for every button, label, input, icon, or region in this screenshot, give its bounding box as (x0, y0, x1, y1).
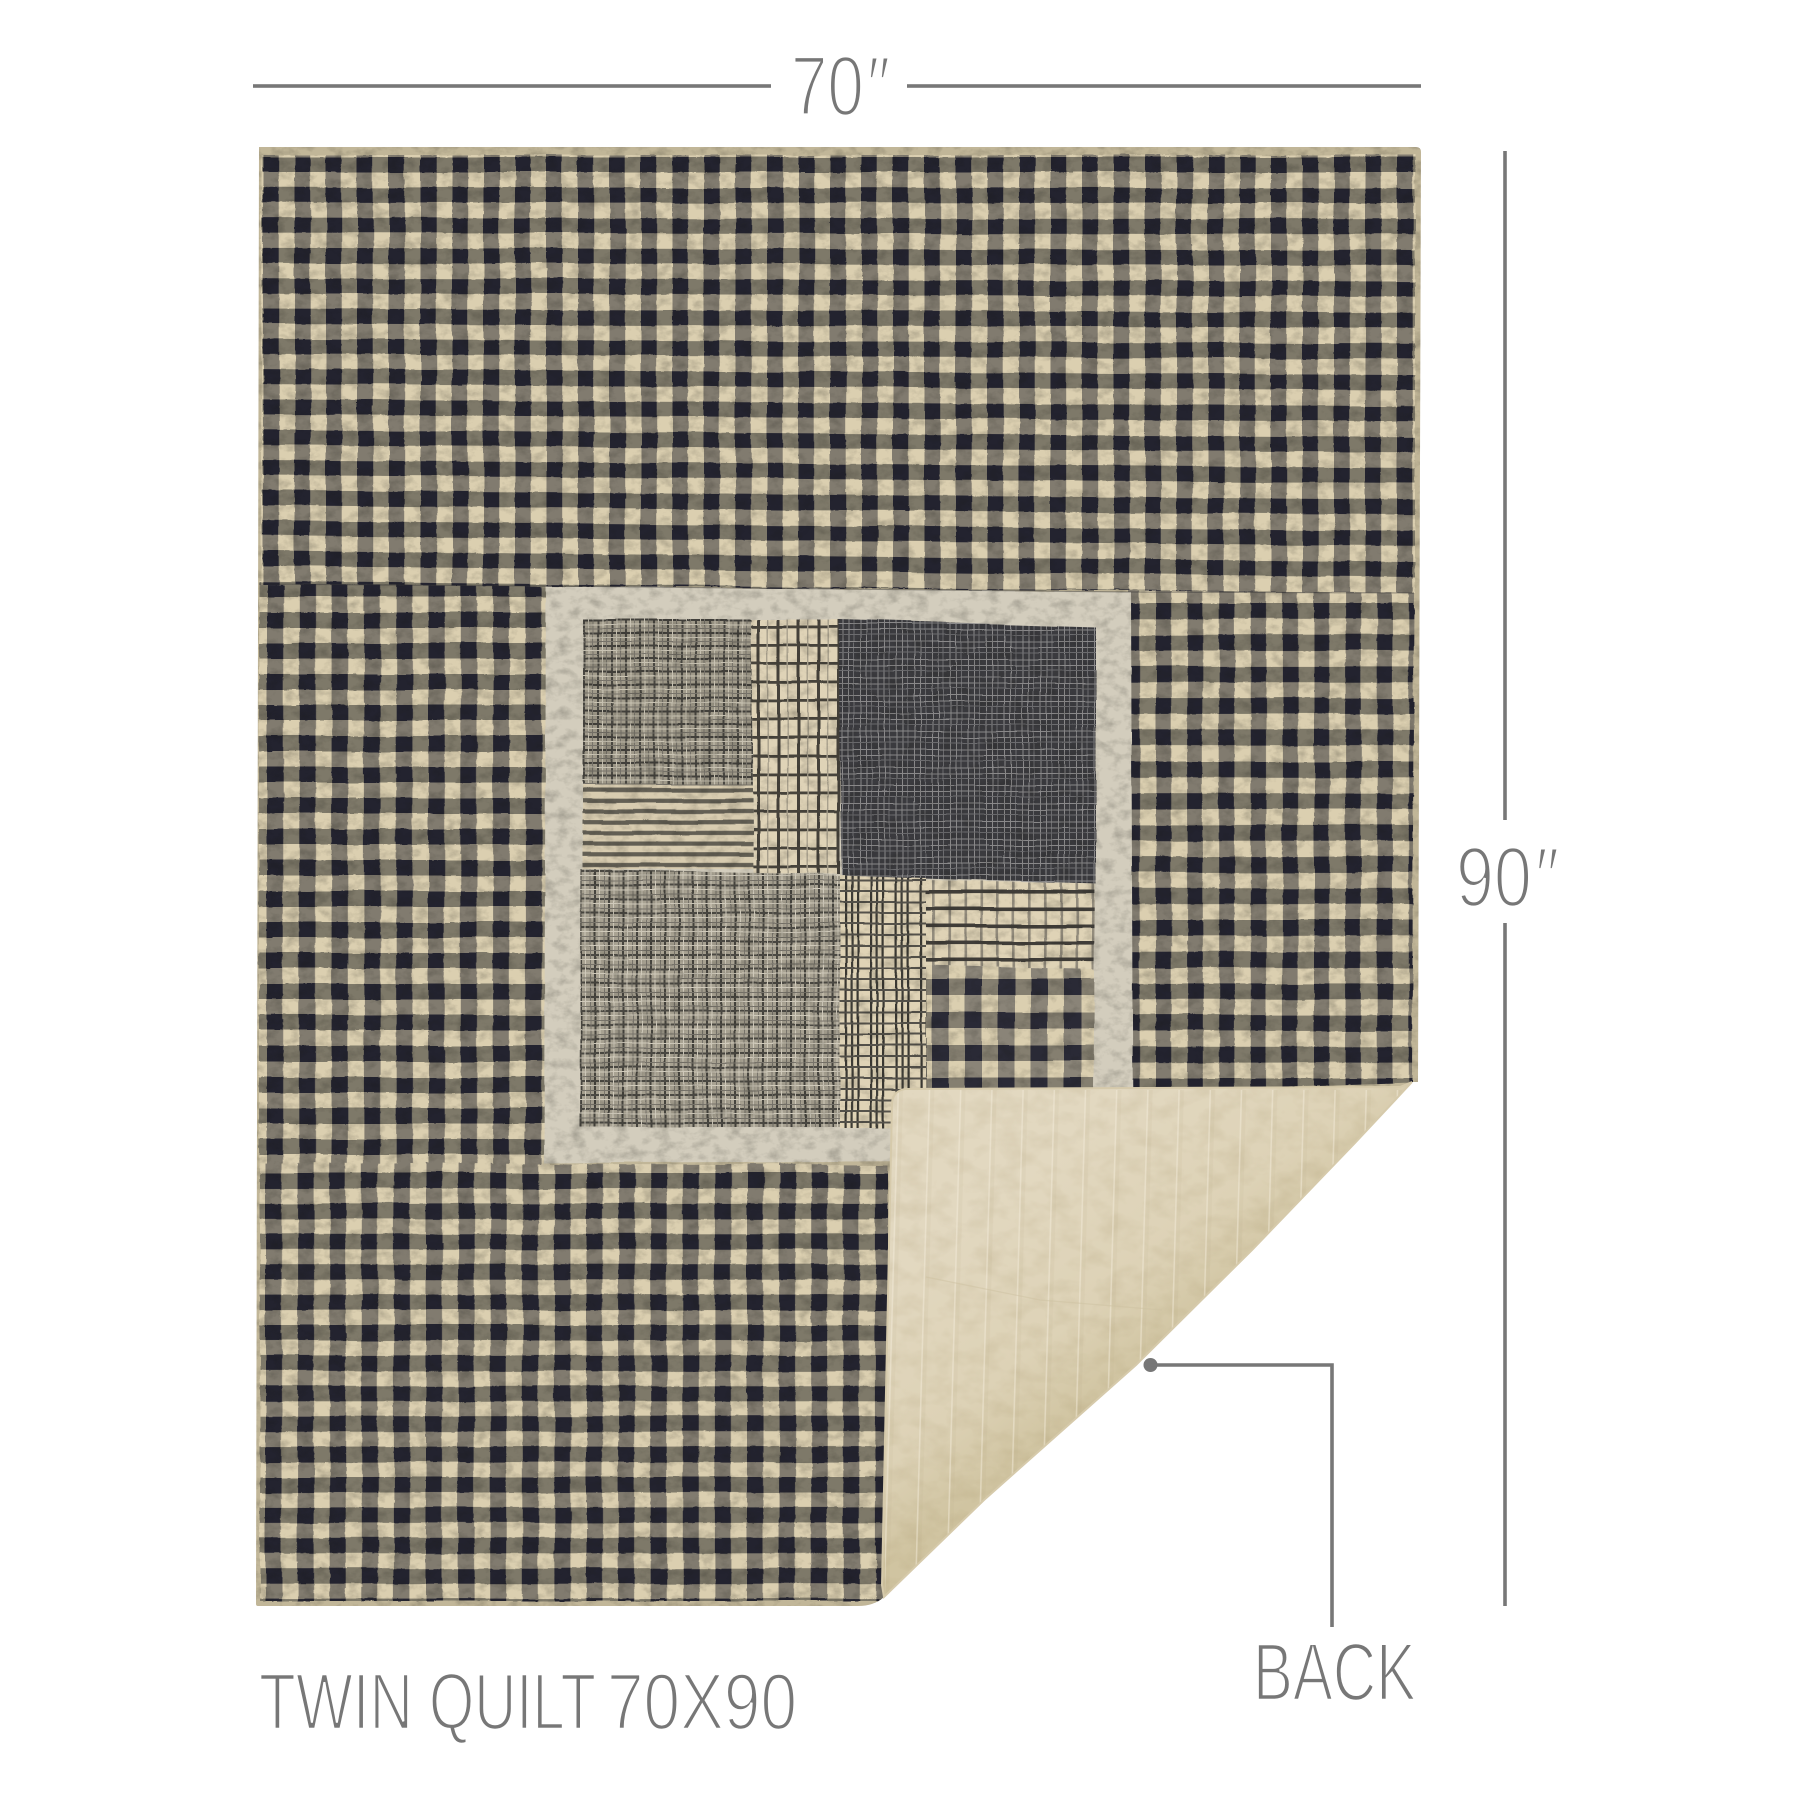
fabric wrinkle texture (256, 147, 1421, 1607)
height dimension rule (1503, 151, 1507, 1606)
callout label: back: BACK (1253, 1627, 1416, 1718)
back edge (882, 1082, 1412, 1597)
panel: right gingham (1128, 590, 1414, 1092)
product title: QUILT (429, 1657, 596, 1746)
callout leader: back (1144, 1358, 1332, 1627)
quilt (256, 147, 1421, 1610)
back wrinkle texture (883, 1088, 1372, 1585)
patch: cream window plaid (751, 619, 840, 874)
panel: top gingham (261, 155, 1415, 593)
height label: 90″ (1456, 830, 1559, 924)
centre block (544, 586, 1133, 1163)
patch: narrow cream plaid (840, 875, 927, 1128)
folded back corner (880, 1080, 1420, 1610)
patch: fine plaid top left (583, 619, 753, 785)
block frame (544, 586, 1133, 1163)
patch: large fine plaid (580, 869, 840, 1128)
width dimension rule (253, 84, 1421, 88)
panel: left gingham (259, 580, 550, 1168)
patch: horizontal ticking stripe (583, 785, 754, 869)
patch: small gingham (926, 965, 1094, 1090)
product title: TWIN (259, 1657, 413, 1746)
product title (259, 1657, 797, 1746)
back fold crease (926, 1277, 1162, 1310)
panel: bottom gingham (260, 1163, 888, 1601)
quilting lines on back (885, 1090, 1415, 1605)
patch: cream check (926, 880, 1095, 970)
seam between top panel and lower panels (259, 584, 1414, 593)
patch: dark fine plaid (838, 619, 1096, 884)
quilt binding (256, 147, 1421, 1606)
width label: 70″ (791, 39, 890, 133)
product title: 70X90 (607, 1657, 797, 1746)
gingham panels (259, 155, 1415, 1601)
